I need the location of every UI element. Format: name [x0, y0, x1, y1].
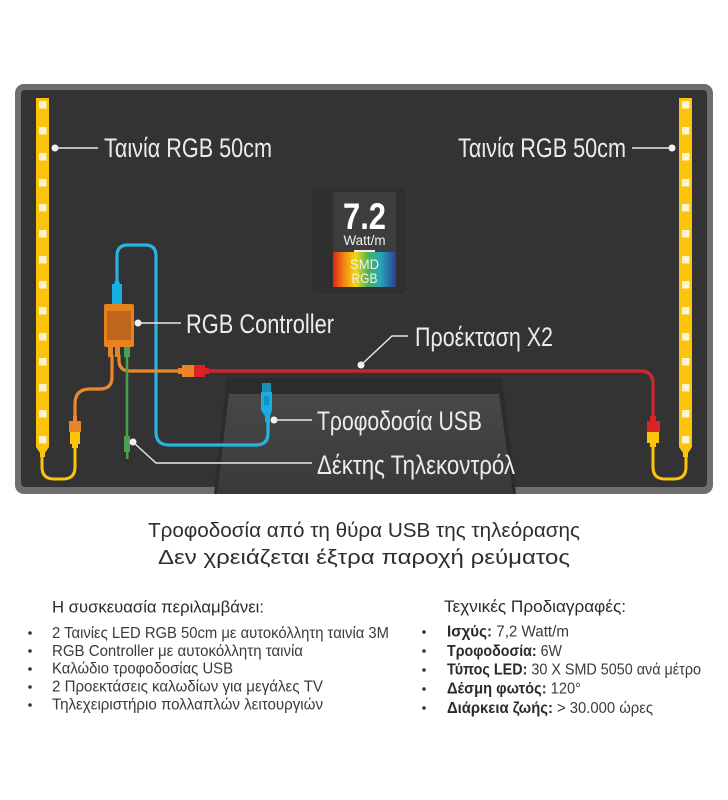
list: specifications: Τύπος LED: 30 X SMD 5050 ανά μέτρο — [447, 662, 701, 678]
panel: package contents — [28, 598, 389, 714]
list: specifications: Ισχύς: 7,2 Watt/m — [447, 624, 569, 640]
power badge: 7.2 — [343, 196, 386, 237]
power badge: Watt/m — [344, 233, 386, 248]
heading: technical specifications: Τεχνικές Προδιαγραφές: — [444, 597, 626, 616]
heading: USB power note — [148, 520, 580, 569]
callout: USB power: Τροφοδοσία USB — [317, 406, 482, 436]
RGB controller box — [104, 304, 134, 357]
list: package items: RGB Controller με αυτοκόλλητη ταινία — [52, 643, 303, 660]
orange cable to extension — [119, 355, 182, 371]
callout: controller — [134, 309, 334, 339]
panel: TV screen — [15, 84, 713, 494]
callout: left strip: Ταινία RGB 50cm — [104, 133, 272, 163]
list: package items — [28, 625, 389, 714]
heading: package contents: Η συσκευασία περιλαμβάνει: — [52, 598, 264, 616]
middle connector — [178, 365, 209, 377]
left LED strip — [36, 98, 49, 457]
left yellow cable — [42, 447, 75, 479]
list: specifications: Δέσμη φωτός: 120° — [447, 680, 581, 698]
callout: left strip — [52, 133, 272, 163]
right yellow cable — [653, 445, 686, 479]
callout: extension — [358, 322, 553, 368]
callout: extension: Προέκταση Χ2 — [415, 322, 553, 352]
green receiver cable — [124, 347, 130, 459]
orange cable to left strip — [75, 355, 112, 420]
red extension cable — [205, 371, 653, 421]
left connector — [69, 416, 81, 448]
list: specifications — [422, 624, 701, 717]
list: specifications: Τροφοδοσία: 6W — [447, 643, 562, 660]
heading: USB power note: Δεν χρειάζεται έξτρα παροχή ρεύματος — [158, 547, 570, 569]
right connector — [647, 416, 660, 447]
list: package items: 2 Προεκτάσεις καλωδίων για μεγάλες TV — [52, 678, 324, 696]
heading: USB power note: Τροφοδοσία από τη θύρα USB της τηλεόρασης — [148, 520, 580, 542]
power badge: RGB — [352, 271, 378, 286]
TV stand — [214, 378, 516, 494]
list: package items: Τηλεχειριστήριο πολλαπλών λειτουργιών — [52, 696, 323, 714]
power badge — [310, 186, 408, 295]
callout: remote receiver — [130, 438, 515, 480]
list: package items: Καλώδιο τροφοδοσίας USB — [52, 660, 233, 678]
callout: USB power — [270, 406, 482, 436]
callout: right strip: Ταινία RGB 50cm — [458, 133, 626, 163]
callout: controller: RGB Controller — [186, 309, 334, 339]
list: specifications: Διάρκεια ζωής: > 30.000 ώρες — [447, 700, 653, 717]
panel: technical specifications — [422, 597, 701, 717]
icon: USB plug — [261, 383, 272, 422]
blue USB cable — [112, 245, 272, 445]
power badge: SMD — [350, 257, 379, 272]
list: package items: 2 Ταινίες LED RGB 50cm με αυτοκόλλητη ταινία 3M — [52, 625, 389, 642]
right LED strip — [679, 98, 692, 457]
callout: remote receiver: Δέκτης Τηλεκοντρόλ — [317, 450, 515, 480]
